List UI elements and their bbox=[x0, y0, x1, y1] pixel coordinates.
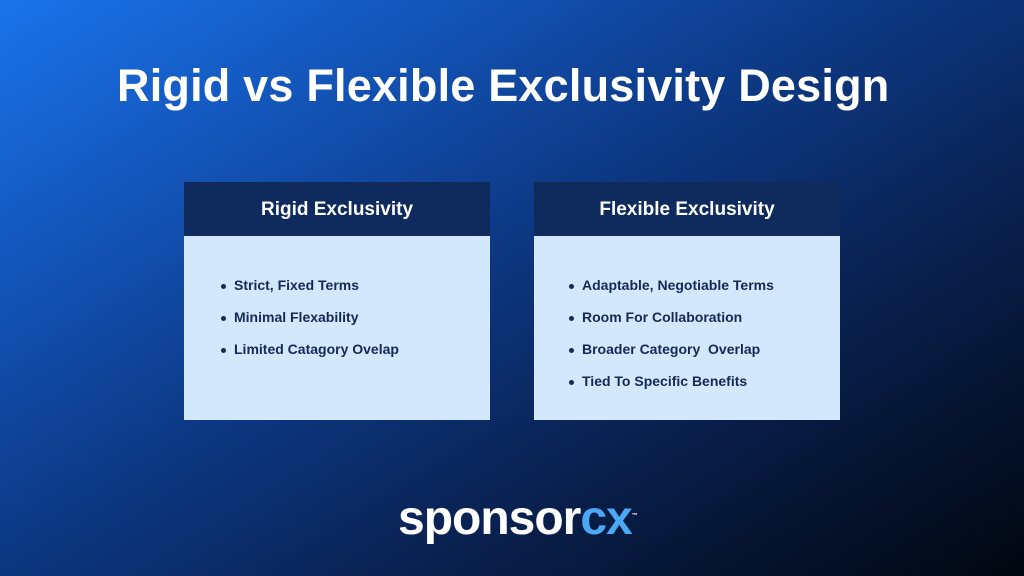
list item: Minimal Flexability bbox=[234, 309, 358, 325]
list item: Room For Collaboration bbox=[582, 309, 742, 325]
list item: Tied To Specific Benefits bbox=[582, 373, 747, 389]
list item: Limited Catagory Ovelap bbox=[234, 341, 399, 357]
heading: flexible: Flexible Exclusivity bbox=[599, 199, 775, 220]
heading: rigid: Rigid Exclusivity bbox=[261, 199, 413, 220]
heading: rigid bbox=[184, 182, 490, 236]
list item: Broader Category Overlap bbox=[582, 341, 760, 357]
list item: Strict, Fixed Terms bbox=[234, 277, 359, 293]
panel: flexible exclusivity bbox=[534, 182, 840, 420]
list item: Adaptable, Negotiable Terms bbox=[582, 277, 774, 293]
title: Rigid vs Flexible Exclusivity Design bbox=[117, 60, 889, 111]
logo: sponsorcx™ bbox=[398, 492, 637, 545]
heading: flexible bbox=[534, 182, 840, 236]
panel: rigid exclusivity bbox=[184, 182, 490, 420]
